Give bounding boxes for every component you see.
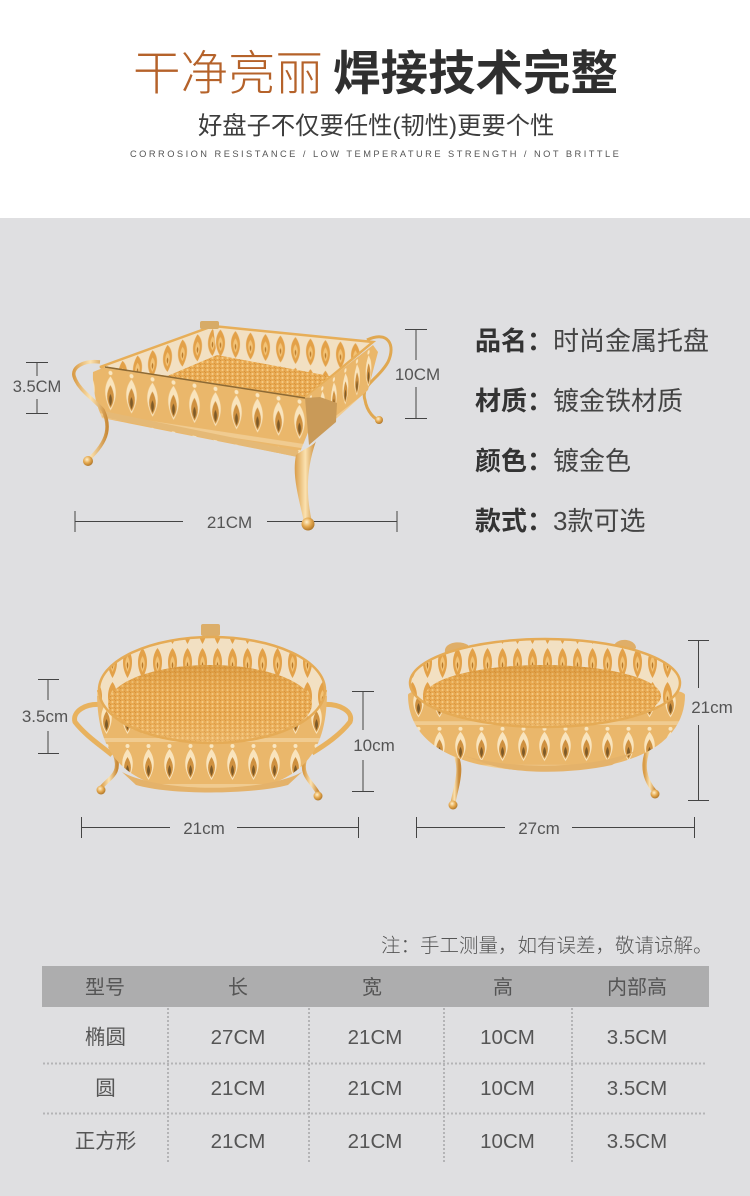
dimension: square inner height 3.5CM — [13, 362, 61, 414]
spec: name: 品名：时尚金属托盘 — [475, 321, 709, 358]
table header bar — [42, 966, 709, 1007]
dimension: round inner height 3.5cm: 3.5cm — [22, 707, 68, 726]
measurement note: 注：手工测量，如有误差，敬请谅解。 — [381, 935, 713, 957]
floor — [165, 355, 335, 398]
table header labels: 长 — [228, 976, 248, 999]
legs — [101, 755, 117, 788]
table dotted grid — [43, 1008, 707, 1164]
back walls — [213, 327, 373, 377]
english tagline: CORROSION RESISTANCE / LOW TEMPERATURE STRENGTH / NOT BRITTLE — [130, 149, 621, 159]
table header labels: 内部高 — [607, 976, 667, 999]
row: square: 10CM — [480, 1130, 535, 1153]
row: oval: 27CM — [211, 1026, 265, 1049]
legs — [450, 745, 459, 803]
table header labels: 型号 — [85, 976, 125, 999]
floor — [425, 665, 661, 727]
dimension: round width 21cm: 21cm — [183, 819, 225, 838]
row: square: 21CM — [348, 1130, 402, 1153]
row: round: 21CM — [211, 1077, 265, 1100]
title — [133, 48, 618, 101]
row: square: 21CM — [211, 1130, 265, 1153]
rim back wall — [99, 637, 325, 743]
subtitle: 好盘子不仅要任性(韧性)更要个性 — [198, 113, 554, 140]
row: oval — [85, 1026, 667, 1049]
size table — [42, 966, 709, 1164]
row: square — [75, 1130, 667, 1153]
row: oval: 10CM — [480, 1026, 535, 1049]
table header labels — [85, 976, 667, 999]
row: round: 圆 — [95, 1077, 116, 1100]
back leg and handle — [364, 337, 391, 420]
product specification list — [475, 321, 709, 538]
row: square: 3.5CM — [607, 1130, 667, 1153]
dimension: round height 10cm: 10cm — [353, 736, 395, 755]
product: oval tray — [408, 639, 685, 810]
handles — [75, 704, 112, 755]
tab — [200, 321, 219, 329]
spec: colour: 颜色：镀金色 — [475, 441, 631, 478]
corner ornament — [305, 397, 337, 445]
row: oval: 椭圆 — [85, 1026, 126, 1049]
dimension: round height 10cm — [352, 691, 395, 792]
row: round — [95, 1077, 667, 1100]
dimension: oval height 21cm: 21cm — [691, 698, 733, 717]
dimension: square width 21CM: 21CM — [207, 513, 252, 532]
tab — [201, 624, 220, 636]
row: oval: 21CM — [348, 1026, 402, 1049]
product: square tray — [74, 321, 391, 530]
dimension: square height 10CM: 10CM — [395, 365, 440, 384]
dimension: round inner height 3.5cm — [22, 679, 68, 754]
floor — [108, 665, 312, 743]
spec: styles: 款式：3款可选 — [475, 501, 646, 538]
dimension: square inner height 3.5CM: 3.5CM — [13, 378, 61, 396]
title: 干净亮丽 — [133, 48, 323, 101]
row: round: 3.5CM — [607, 1077, 667, 1100]
row: round: 10CM — [480, 1077, 535, 1100]
table header labels: 宽 — [362, 976, 382, 999]
front wall — [93, 367, 309, 457]
spec: material: 材质：镀金铁材质 — [475, 381, 683, 418]
dimension: square height 10CM — [395, 329, 440, 418]
row: round: 21CM — [348, 1077, 402, 1100]
product: round tray — [75, 624, 351, 800]
left handle and leg — [74, 362, 107, 460]
dimension: oval width 27cm: 27cm — [518, 819, 560, 838]
table header labels: 高 — [493, 976, 513, 999]
row: square: 正方形 — [75, 1130, 136, 1153]
right wall — [305, 345, 378, 432]
body — [97, 690, 327, 792]
row: oval: 3.5CM — [607, 1026, 667, 1049]
tabs — [445, 642, 468, 653]
body — [408, 684, 685, 771]
front leg — [295, 441, 316, 522]
title: 焊接技术完整 — [333, 48, 618, 101]
rim back wall — [410, 639, 680, 727]
